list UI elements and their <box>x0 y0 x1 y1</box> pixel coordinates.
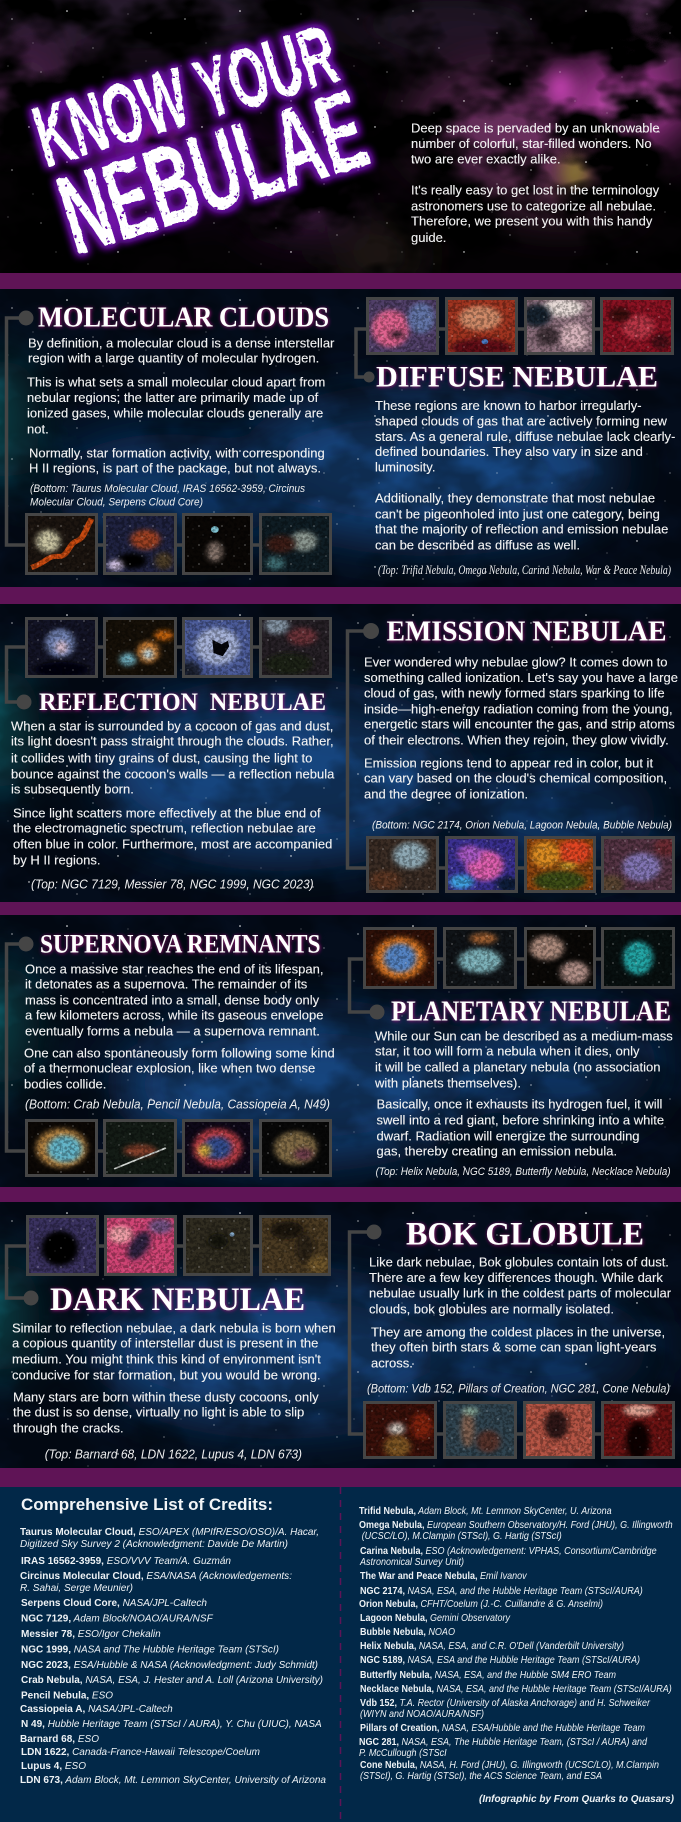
thumbnail: NGC 2174 <box>366 836 439 893</box>
credits list: right column: Bubble Nebula, NOAO <box>360 1626 455 1638</box>
panel: credits <box>0 1487 681 1822</box>
body text: the electromagnetic spectrum, reflection nebulae are <box>13 821 316 836</box>
body text: it collides with tiny grains of dust, causing the light to <box>11 750 312 765</box>
body text <box>375 398 675 553</box>
intro text <box>411 121 660 245</box>
body text: conducive for star formation, but you would be wrong. <box>12 1368 321 1383</box>
thumbnail: NGC 281 <box>523 1401 595 1459</box>
connector <box>6 647 268 710</box>
credits list: right column: (UCSC/LO), M.Clampin (STScI), G. Hartig (STScI) <box>362 1530 562 1542</box>
connector <box>348 623 639 868</box>
body text: shaped clouds of gas that are actively forming new <box>375 413 668 428</box>
body text: something called ionization. Let's say you have a large <box>364 670 678 685</box>
credits list: left column: Barnard 68, ESO <box>20 1733 99 1745</box>
body text: bodies collide. <box>24 1077 106 1092</box>
panel: bok globule <box>350 1216 675 1461</box>
body text: medium. You might think this kind of environment isn't <box>12 1352 321 1367</box>
body text: it detonates as a supernova. The remainder of its <box>25 977 308 992</box>
thumbnail: Lagoon Nebula <box>524 836 596 893</box>
credits list: left column: Pencil Nebula, ESO <box>21 1689 113 1701</box>
body text: not. <box>27 422 49 437</box>
thumbnail: NGC 2023 <box>259 617 332 678</box>
heading: MOLECULAR CLOUDS <box>38 303 329 334</box>
body text: Basically, once it exhausts its hydrogen fuel, it will <box>376 1097 663 1112</box>
body text: by H II regions. <box>13 853 100 868</box>
credits list: left column: Circinus Molecular Cloud, ESA/NASA (Acknowledgements: <box>20 1570 292 1582</box>
panel: diffuse nebulae <box>356 297 675 577</box>
body text: luminosity. <box>375 460 435 475</box>
body text: While our Sun can be described as a medium-mass <box>375 1029 673 1044</box>
panel: section 4 background <box>0 1202 681 1468</box>
body text: nebular regions; the latter are primarily made up of <box>27 390 319 405</box>
caption: (Top: NGC 7129, Messier 78, NGC 1999, NGC 2023) <box>31 878 314 892</box>
connector <box>350 959 637 1020</box>
intro text: two are ever exactly alike. <box>411 152 561 167</box>
panel: reflection nebulae <box>6 617 335 892</box>
body text: One can also spontaneously form following some kind <box>24 1046 335 1061</box>
panel: supernova remnants <box>6 930 335 1177</box>
thumbnail: Butterfly Nebula <box>524 927 596 989</box>
thumbnail: Pillars of Creation <box>443 1401 517 1459</box>
caption <box>30 483 305 508</box>
credits list: right column: Lagoon Nebula, Gemini Observatory <box>360 1612 511 1624</box>
thumbnail: Taurus Molecular Cloud <box>25 513 98 575</box>
intro text: astronomers use to categorize all nebulae. <box>411 199 656 214</box>
body text <box>24 962 335 1092</box>
panel: emission nebulae <box>348 617 679 895</box>
credits list: right column: P. McCullough (STScI <box>359 1747 447 1759</box>
body text: Similar to reflection nebulae, a dark nebula is born when <box>12 1321 336 1336</box>
body text <box>12 1321 336 1436</box>
body text: Like dark nebulae, Bok globules contain lots of dust. <box>369 1255 669 1270</box>
thumbnail: Cone Nebula <box>601 1401 675 1461</box>
thumbnail: NGC 1999 <box>175 617 253 683</box>
credits list: left column: R. Sahai, Serge Meunier) <box>20 1582 133 1594</box>
caption: (Bottom: Vdb 152, Pillars of Creation, NGC 281, Cone Nebula) <box>367 1384 670 1396</box>
credits list: left column: Crab Nebula, NASA, ESA, J. Hester and A. Loll (Arizona University) <box>21 1674 323 1686</box>
credits list: right column: Pillars of Creation, NASA, ESA/Hubble and the Hubble Heritage Team <box>360 1722 645 1734</box>
thumbnail: Orion Nebula <box>445 836 520 893</box>
credits list: right column: Helix Nebula, NASA, ESA, and C.R. O'Dell (Vanderbilt University) <box>360 1640 624 1652</box>
body text: a copious quantity of interstellar dust is present in the <box>12 1336 318 1351</box>
thumbnail: IRAS 16562-3959 <box>103 513 177 575</box>
credits heading: Comprehensive List of Credits: <box>21 1495 273 1514</box>
heading: DIFFUSE NEBULAE <box>376 361 658 394</box>
caption: (Bottom: Taurus Molecular Cloud, IRAS 16562-3959, Circinus <box>30 483 305 495</box>
credits list: left column: Messier 78, ESO/Igor Chekalin <box>21 1628 161 1640</box>
thumbnail: NGC 5189 <box>443 927 517 989</box>
body text <box>27 336 335 476</box>
thumbnail: Lupus 4 <box>183 1215 253 1276</box>
body text: and the degree of ionization. <box>364 787 528 802</box>
intro text: Deep space is pervaded by an unknowable <box>411 121 660 136</box>
infographic attribution: (Infographic by From Quarks to Quasars) <box>479 1793 674 1805</box>
body text: star, it too will form a nebula when it dies, only <box>375 1044 640 1059</box>
body text: When a star is surrounded by a cocoon of gas and dust, <box>11 719 333 734</box>
body text: can't be pigeonholed into just one category, being <box>375 507 660 522</box>
heading: BOK GLOBULE <box>406 1216 644 1252</box>
body text: Ever wondered why nebulae glow? It comes down to <box>364 655 668 670</box>
body text <box>11 719 335 868</box>
panel: molecular clouds <box>6 303 335 575</box>
body text: swell into a red giant, before shrinking into a white <box>376 1113 664 1128</box>
divider bars <box>0 273 681 1487</box>
intro text: It's really easy to get lost in the terminology <box>411 183 660 198</box>
panel: dark nebulae <box>6 1215 336 1462</box>
body text: Many stars are born within these dusty cocoons, only <box>13 1390 319 1405</box>
panel: section 1 background <box>0 289 681 587</box>
credits list: right column: The War and Peace Nebula, Emil Ivanov <box>360 1570 527 1582</box>
body text: inside—high-energy radiation coming from the young, <box>364 702 673 717</box>
title line: Nebulae: NEBULAE <box>45 66 380 278</box>
thumbnail: Pencil Nebula <box>103 1119 177 1177</box>
credits list: right column: Orion Nebula, CFHT/Coelum (J.-C. Cuillandre & G. Anselmi) <box>359 1598 603 1610</box>
thumbnail: Bubble Nebula <box>597 836 679 895</box>
body text: Additionally, they demonstrate that most nebulae <box>375 491 655 506</box>
thumbnail: LDN 1622 <box>104 1215 177 1276</box>
connector <box>6 936 268 1151</box>
thumbnail: NGC 7129 <box>25 617 98 678</box>
credits list: right column: NGC 2174, NASA, ESA, and the Hubble Heritage Team (STScI/AURA) <box>360 1585 643 1597</box>
heading: EMISSION NEBULAE <box>386 617 666 648</box>
body text: across. <box>371 1356 413 1371</box>
body text: They are among the coldest places in the universe, <box>371 1325 665 1340</box>
thumbnail: Omega Nebula <box>445 297 518 357</box>
credits list: left column: Lupus 4, ESO <box>21 1760 86 1772</box>
credits list: left column: Serpens Cloud Core, NASA/JPL-Caltech <box>21 1597 207 1609</box>
body text: it will be called a planetary nebula (no association <box>375 1060 660 1075</box>
credits list: right column <box>359 1505 673 1782</box>
body text: H II regions, is part of the package, but not always. <box>29 461 321 476</box>
credits list: right column: Butterfly Nebula, NASA, ESA, and the Hubble SM4 ERO Team <box>360 1669 616 1681</box>
thumbnail: Crab Nebula <box>25 1119 98 1177</box>
thumbnail: War and Peace Nebula <box>600 297 674 355</box>
body text: with planets themselves). <box>374 1076 521 1091</box>
thumbnail: Messier 78 <box>103 617 177 678</box>
body text: energetic stars will encounter the gas, and strip atoms <box>364 717 675 732</box>
connector <box>356 329 639 382</box>
intro text: Therefore, we present you with this handy <box>411 214 653 229</box>
body text: Once a massive star reaches the end of its lifespan, <box>25 962 323 977</box>
body text: These regions are known to harbor irregularly- <box>375 398 642 413</box>
panel: planetary nebulae <box>350 927 675 1178</box>
body text: of a thermonuclear explosion, like when two dense <box>24 1061 315 1076</box>
body text: cloud of gas, with newly formed stars sparking to life <box>364 686 665 701</box>
body text: of their electrons. When they rejoin, they glow vividly. <box>364 733 669 748</box>
thumbnail: Barnard 68 <box>26 1215 99 1276</box>
body text: dwarf. Radiation will energize the surrounding <box>376 1129 640 1144</box>
credits list: left column: N 49, Hubble Heritage Team (STScI / AURA), Y. Chu (UIUC), NASA <box>21 1718 322 1730</box>
credits list: left column: NGC 7129, Adam Block/NOAO/AURA/NSF <box>21 1613 213 1625</box>
thumbnail: Vdb 152 <box>363 1401 437 1459</box>
credits list: right column: (STScI), G. Hartig (STScI), the ACS Science Team, and ESA <box>360 1770 602 1782</box>
body text: stars. As a general rule, diffuse nebulae lack clearly- <box>375 429 675 444</box>
body text: can be described as diffuse as well. <box>375 538 580 553</box>
credits list: left column: IRAS 16562-3959, ESO/VVV Team/A. Guzmán <box>21 1555 231 1567</box>
body text: There are a few key differences though. While dark <box>369 1270 663 1285</box>
panel: section 2 background <box>0 604 681 902</box>
body text: is subsequently born. <box>11 782 134 797</box>
caption: Molecular Cloud, Serpens Cloud Core) <box>30 496 203 508</box>
heading: SUPERNOVA REMNANTS <box>40 930 320 959</box>
caption: (Top: Barnard 68, LDN 1622, Lupus 4, LDN 673) <box>45 1448 302 1462</box>
connector <box>6 310 268 545</box>
credits list: right column: NGC 281, NASA, ESA, The Hubble Heritage Team, (STScI / AURA) and <box>359 1736 648 1748</box>
thumbnail: Trifid Nebula <box>366 297 439 355</box>
caption: (Bottom: Crab Nebula, Pencil Nebula, Cassiopeia A, N49) <box>25 1097 330 1111</box>
credits list: left column: Taurus Molecular Cloud, ESO/APEX (MPIfR/ESO/OSO)/A. Hacar, <box>20 1526 319 1538</box>
body text <box>369 1255 672 1371</box>
credits list: left column: NGC 2023, ESA/Hubble & NASA (Acknowledgment: Judy Schmidt) <box>21 1659 318 1671</box>
credits list: right column: Trifid Nebula, Adam Block, Mt. Lemmon SkyCenter, U. Arizona <box>359 1505 612 1517</box>
body text: nebulae usually lurk in the coldest parts of molecular <box>369 1286 672 1301</box>
thumbnail: LDN 673 <box>259 1215 331 1276</box>
intro text: guide. <box>411 230 446 245</box>
body text <box>374 1029 673 1159</box>
thumbnail: Cassiopeia A <box>182 1119 253 1177</box>
body text: Since light scatters more effectively at the blue end of <box>13 806 321 821</box>
body text: its light doesn't pass straight through the clouds. Rather, <box>11 734 334 749</box>
body text: that the majority of reflection and emission nebulae <box>375 522 668 537</box>
intro text: number of colorful, star-filled wonders. No <box>411 136 652 151</box>
title <box>24 7 380 278</box>
body text: defined boundaries. They also vary in size and <box>375 444 643 459</box>
credits list: right column: NGC 5189, NASA, ESA and the Hubble Heritage Team (STScI/AURA) <box>360 1654 640 1666</box>
body text: This is what sets a small molecular cloud apart from <box>27 375 325 390</box>
body text <box>364 655 678 802</box>
body text: Normally, star formation activity, with corresponding <box>29 446 325 461</box>
connector <box>6 1246 269 1306</box>
credits list: left column <box>20 1526 326 1786</box>
panel: section 3 background <box>0 915 681 1187</box>
credits list: left column: Digitized Sky Survey 2 (Acknowledgment: Davide De Martin) <box>20 1538 288 1550</box>
body text: ionized gases, while molecular clouds generally are <box>27 406 323 421</box>
body text: often blue in color. Furthermore, most are accompanied <box>13 837 332 852</box>
body text: eventually forms a nebula — a supernova remnant. <box>25 1024 320 1039</box>
body text: gas, thereby creating an emission nebula. <box>376 1144 617 1159</box>
body text: mass is concentrated into a small, dense body only <box>25 993 320 1008</box>
thumbnail: Helix Nebula <box>363 927 437 989</box>
thumbnail: N49 <box>259 1119 332 1177</box>
thumbnail: Necklace Nebula <box>601 927 675 989</box>
thumbnail: Carina Nebula <box>522 297 595 355</box>
body text: By definition, a molecular cloud is a dense interstellar <box>28 336 335 351</box>
body text: bounce against the cocoon's walls — a reflection nebula <box>11 767 335 782</box>
panel: hero background <box>0 0 681 273</box>
connector <box>350 1224 637 1434</box>
credits list: left column: NGC 1999, NASA and The Hubble Heritage Team (STScI) <box>21 1643 279 1655</box>
body text: they often birth stars & some can span light-years <box>371 1340 657 1355</box>
credits list: right column: (WIYN and NOAO/AURA/NSF) <box>360 1708 484 1720</box>
body text: Emission regions tend to appear red in color, but it <box>364 756 653 771</box>
thumbnail: Serpens Cloud Core <box>259 513 332 575</box>
credits list: left column: LDN 673, Adam Block, Mt. Lemmon SkyCenter, University of Arizona <box>20 1774 326 1786</box>
body text: clouds, bok globules are normally isolated. <box>369 1302 614 1317</box>
credits list: left column: Cassiopeia A, NASA/JPL-Caltech <box>20 1703 173 1715</box>
credits list: right column: Astronomical Survey Unit) <box>359 1556 464 1568</box>
heading: REFLECTION NEBULAE <box>39 689 326 716</box>
body text: the dust is so dense, virtually no light is able to slip <box>13 1405 304 1420</box>
body text: can vary based on the cloud's chemical composition, <box>364 771 667 786</box>
heading: DARK NEBULAE <box>50 1282 305 1318</box>
body text: through the cracks. <box>13 1421 124 1436</box>
thumbnail: Circinus Molecular Cloud <box>182 513 253 575</box>
body text: region with a large quantity of molecular hydrogen. <box>28 351 319 366</box>
body text: a few kilometers across, while its gaseous envelope <box>25 1008 323 1023</box>
credits list: left column: LDN 1622, Canada-France-Hawaii Telescope/Coelum <box>21 1746 260 1758</box>
